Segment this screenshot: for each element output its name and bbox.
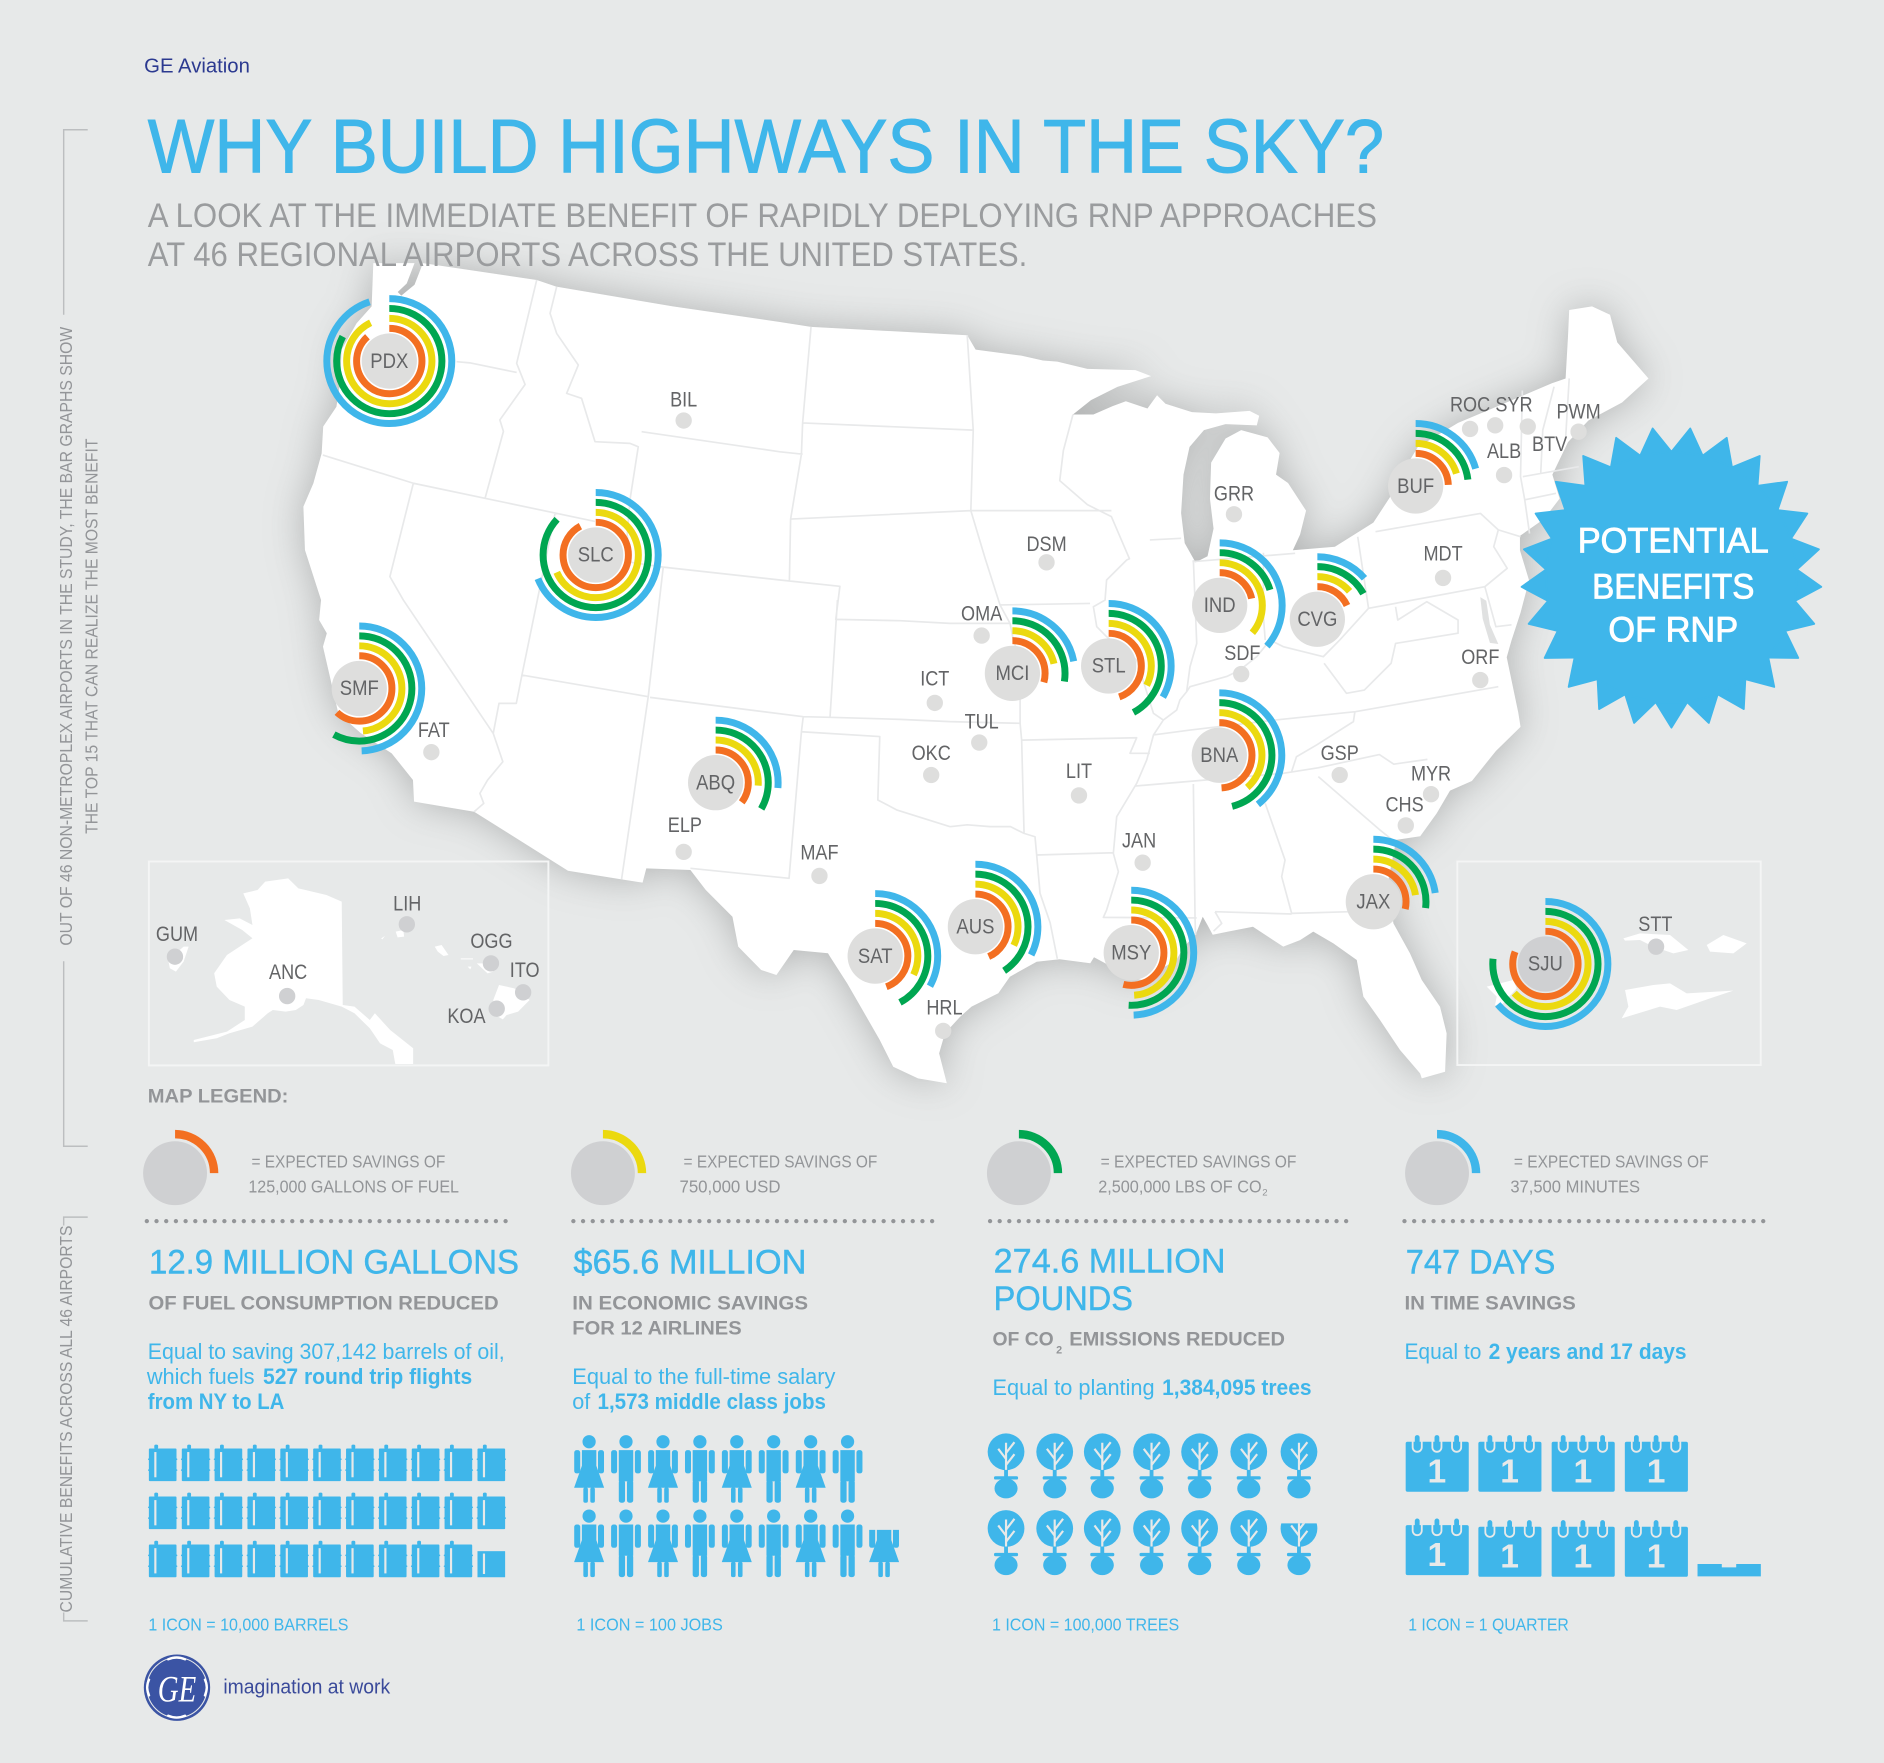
inset: Alaska, Hawaii, Guam [149, 861, 548, 1065]
airport: TUL [965, 710, 999, 751]
bar graph: SLC: SLC [578, 544, 614, 567]
airport: ITO: ITO [510, 959, 540, 982]
legend: time [1405, 1134, 1709, 1205]
pictogram: calendars: 1 [1647, 1454, 1665, 1491]
bar graph: BNA [1157, 693, 1282, 818]
bar graph: MSY: MSY [1111, 941, 1151, 965]
airport: GRR [1214, 482, 1254, 522]
airport: STT [1638, 913, 1672, 955]
time headline: 747 DAYS [1406, 1243, 1555, 1281]
bar graph: AUS [913, 864, 1038, 989]
bar graph: IND [1157, 543, 1282, 668]
fuel equivalence text: from NY to LA [148, 1389, 284, 1414]
airport: MYR: MYR [1411, 762, 1451, 786]
CO2 headline: 274.6 MILLION [994, 1242, 1226, 1280]
airport: BIL [670, 388, 697, 429]
bar graph: MSY [1069, 890, 1194, 1015]
pictogram: calendars: 1 [1428, 1454, 1446, 1491]
airport: STT: STT [1638, 913, 1672, 937]
starburst: potential benefits of RNP [1521, 426, 1822, 728]
bar graph: JAX: JAX [1356, 890, 1390, 914]
time equivalence text [1404, 1339, 1687, 1364]
time equivalence text: 2 years and 17 days [1489, 1339, 1687, 1364]
airport: PWM [1556, 401, 1601, 440]
airport: ROC [1450, 393, 1490, 437]
side note: top 15 airports [56, 130, 101, 1146]
bar graph: BNA: BNA [1200, 744, 1239, 767]
tagline: imagination at work [223, 1676, 391, 1698]
legend: CO2: 2,500,000 LBS OF CO [1098, 1176, 1262, 1196]
legend: time: = EXPECTED SAVINGS OF [1514, 1151, 1709, 1171]
side note: cumulative benefits [56, 1217, 88, 1621]
money subhead [572, 1292, 808, 1339]
GE logo: GE [158, 1669, 196, 1710]
fuel headline: 12.9 MILLION GALLONS [149, 1243, 519, 1281]
CO2 equivalence text: 1,384,095 trees [1162, 1375, 1312, 1400]
pictogram: oil barrels [148, 1445, 506, 1577]
money equivalence text: of [572, 1389, 591, 1414]
airport: MDT: MDT [1423, 542, 1463, 566]
bar graph: SMF [297, 626, 422, 751]
bar graph: STL: STL [1092, 655, 1126, 678]
money equivalence text: 1,573 middle class jobs [598, 1389, 826, 1414]
legend: fuel [143, 1134, 459, 1205]
airport: TUL: TUL [965, 710, 999, 734]
airport: ANC: ANC [269, 961, 307, 985]
starburst: potential benefits of RNP: OF RNP [1608, 611, 1738, 650]
airport: ALB: ALB [1487, 440, 1521, 463]
airport: MAF [800, 841, 839, 884]
pictogram: calendars: 1 [1500, 1539, 1519, 1576]
airport: LIT [1066, 760, 1092, 804]
map shadow [303, 263, 1648, 1083]
airport: BTV [1520, 418, 1567, 457]
airport: LIH: LIH [393, 892, 421, 916]
bar graph: ABQ [653, 720, 778, 845]
legend: CO2 [987, 1134, 1296, 1205]
airport: DSM: DSM [1026, 533, 1067, 556]
bar graph: MCI: MCI [995, 662, 1029, 685]
airport: GUM: GUM [156, 923, 198, 946]
airport: ICT [920, 667, 949, 711]
panel: economic savings [572, 1243, 899, 1635]
starburst: potential benefits of RNP: BENEFITS [1592, 567, 1754, 606]
airport: ITO [510, 959, 540, 1001]
legend: money: 750,000 USD [679, 1176, 781, 1196]
airport: ROC: ROC [1450, 393, 1490, 417]
CO2 headline [994, 1242, 1226, 1318]
bar graph: BUF: BUF [1397, 475, 1434, 498]
starburst: potential benefits of RNP: POTENTIAL [1578, 521, 1769, 560]
airport: CHS: CHS [1385, 793, 1424, 817]
money headline: $65.6 MILLION [573, 1243, 806, 1281]
CO2 subhead [992, 1329, 1285, 1356]
airport: MYR [1411, 762, 1451, 802]
airport: FAT [418, 719, 450, 760]
airport: LIT: LIT [1066, 760, 1092, 783]
airport: DSM [1026, 533, 1067, 570]
CO2 subhead: 2 [1056, 1344, 1062, 1356]
airport: SDF: SDF [1224, 642, 1260, 666]
money subhead: FOR 12 AIRLINES [572, 1317, 742, 1339]
airport: ORF: ORF [1461, 646, 1499, 669]
airport: JAN [1122, 829, 1156, 871]
pictogram: calendars: 1 [1428, 1537, 1446, 1574]
legend: CO2: 2 [1262, 1188, 1268, 1199]
bar graph: SLC [533, 493, 658, 617]
bar graph: PDX: PDX [370, 350, 408, 373]
CO2 equivalence text [992, 1375, 1312, 1400]
airport: ICT: ICT [920, 667, 949, 691]
airport: GSP: GSP [1321, 742, 1359, 765]
airport: KOA [447, 1001, 505, 1029]
money subhead: IN ECONOMIC SAVINGS [572, 1292, 808, 1314]
bar graph: CVG [1255, 557, 1380, 682]
bar graph: SJU: SJU [1528, 953, 1563, 976]
airport: ALB [1487, 440, 1521, 483]
bar graph: CVG: CVG [1297, 608, 1337, 631]
map of the United States [303, 263, 1648, 1083]
bar graph: SJU [1483, 902, 1608, 1026]
airport: GRR: GRR [1214, 482, 1254, 506]
legend: fuel: 125,000 GALLONS OF FUEL [248, 1176, 459, 1196]
bar graph: ABQ: ABQ [696, 771, 735, 795]
airport: OMA [961, 602, 1003, 644]
pictogram: calendars: 1 [1500, 1454, 1519, 1491]
legend: money: = EXPECTED SAVINGS OF [684, 1151, 877, 1171]
panel: CO2 emissions [988, 1242, 1317, 1635]
airport: HRL [926, 996, 963, 1039]
fuel subhead: OF FUEL CONSUMPTION REDUCED [149, 1292, 499, 1314]
time icon key: 1 ICON = 1 QUARTER [1408, 1615, 1569, 1635]
money equivalence text: Equal to the full-time salary [572, 1364, 836, 1389]
Guam [168, 947, 189, 972]
Alaska [194, 878, 413, 1064]
bar graph: STL [1046, 604, 1171, 728]
money icon key: 1 ICON = 100 JOBS [576, 1615, 723, 1635]
bar graph: SMF: SMF [340, 677, 379, 701]
GE logo [144, 1655, 210, 1721]
bar graph: SAT: SAT [858, 945, 893, 968]
pictogram: calendars: 1 [1574, 1454, 1592, 1491]
CO2 subhead: EMISSIONS REDUCED [1069, 1329, 1285, 1351]
panel: time savings [1404, 1243, 1761, 1635]
state borders [323, 280, 1579, 959]
airport: CHS [1385, 793, 1424, 834]
airport: BTV: BTV [1532, 433, 1567, 457]
publisher: GE Aviation: GE Aviation [144, 56, 250, 78]
legend: time: 37,500 MINUTES [1510, 1176, 1640, 1196]
bar graph: AUS: AUS [956, 915, 994, 939]
airport: BIL: BIL [670, 388, 697, 412]
side note: top 15 airports: OUT OF 46 NON-METROPLEX AIRPORTS IN THE STUDY, THE BAR GRAPHS SHOW [56, 326, 76, 946]
airport: OKC: OKC [912, 742, 951, 765]
Hawaii [381, 930, 530, 1019]
CO2 equivalence text: Equal to planting [992, 1375, 1155, 1400]
airport: SYR: SYR [1495, 393, 1533, 417]
bar graph: MCI [950, 611, 1075, 736]
subtitle: AT 46 REGIONAL AIRPORTS ACROSS THE UNITED STATES. [148, 236, 1027, 274]
time equivalence text: Equal to [1404, 1339, 1481, 1364]
airport: PWM: PWM [1556, 401, 1601, 424]
side note: cumulative benefits: CUMULATIVE BENEFITS ACROSS ALL 46 AIRPORTS [56, 1226, 76, 1612]
subtitle [148, 197, 1377, 274]
airport: ORF [1461, 646, 1499, 688]
side note: top 15 airports: THE TOP 15 THAT CAN REALIZE THE MOST BENEFIT [81, 438, 101, 834]
airport: SDF [1224, 642, 1260, 682]
fuel equivalence text: 527 round trip flights [263, 1364, 472, 1389]
CO2 subhead: OF CO [992, 1329, 1054, 1351]
fuel equivalence text [146, 1339, 505, 1414]
money equivalence text [572, 1364, 836, 1414]
bar graph: PDX [327, 299, 452, 424]
airport: OKC [912, 742, 951, 783]
pictogram: calendars: 1 [1647, 1539, 1665, 1576]
airport: ELP: ELP [668, 814, 702, 837]
airport: SYR [1487, 393, 1533, 434]
bar graph: JAX [1311, 839, 1436, 964]
airport: ANC [269, 961, 307, 1004]
fuel equivalence text: Equal to saving 307,142 barrels of oil, [148, 1339, 505, 1364]
title: WHY BUILD HIGHWAYS IN THE SKY? [148, 105, 1384, 190]
CO2 icon key: 1 ICON = 100,000 TREES [992, 1615, 1179, 1635]
airport: KOA: KOA [447, 1005, 486, 1029]
airport: JAN: JAN [1122, 829, 1156, 853]
legend: money [571, 1134, 877, 1205]
time subhead: IN TIME SAVINGS [1404, 1292, 1576, 1314]
airport: OGG [470, 930, 513, 972]
airport: MAF: MAF [800, 841, 839, 865]
panel: fuel [146, 1243, 519, 1635]
chesapeake bay [1480, 597, 1498, 644]
airport: OMA: OMA [961, 602, 1003, 626]
airport: GUM [156, 923, 198, 965]
airport: GSP [1321, 742, 1359, 783]
pictogram: people [574, 1435, 899, 1577]
airport: FAT: FAT [418, 719, 450, 742]
airport: HRL: HRL [926, 996, 963, 1020]
airport: MDT [1423, 542, 1463, 586]
bar graph: IND: IND [1204, 594, 1236, 617]
fuel equivalence text: which fuels [146, 1364, 255, 1389]
fuel icon key: 1 ICON = 10,000 BARRELS [148, 1615, 348, 1635]
airport: LIH [393, 892, 421, 933]
subtitle: A LOOK AT THE IMMEDIATE BENEFIT OF RAPIDLY DEPLOYING RNP APPROACHES [148, 197, 1377, 235]
legend: fuel: = EXPECTED SAVINGS OF [251, 1151, 445, 1171]
legend: CO2: = EXPECTED SAVINGS OF [1101, 1151, 1296, 1171]
inset: Puerto Rico and Virgin Islands [1457, 861, 1761, 1065]
CO2 headline: POUNDS [994, 1280, 1133, 1318]
airport: OGG: OGG [470, 930, 513, 953]
bar graph: SAT [813, 894, 938, 1019]
pictogram: calendars [1406, 1435, 1761, 1577]
airport: ELP [668, 814, 702, 860]
pictogram: trees [988, 1433, 1317, 1575]
pictogram: calendars: 1 [1574, 1539, 1592, 1576]
map legend heading: MAP LEGEND: [148, 1086, 288, 1108]
bar graph: BUF [1353, 424, 1478, 548]
